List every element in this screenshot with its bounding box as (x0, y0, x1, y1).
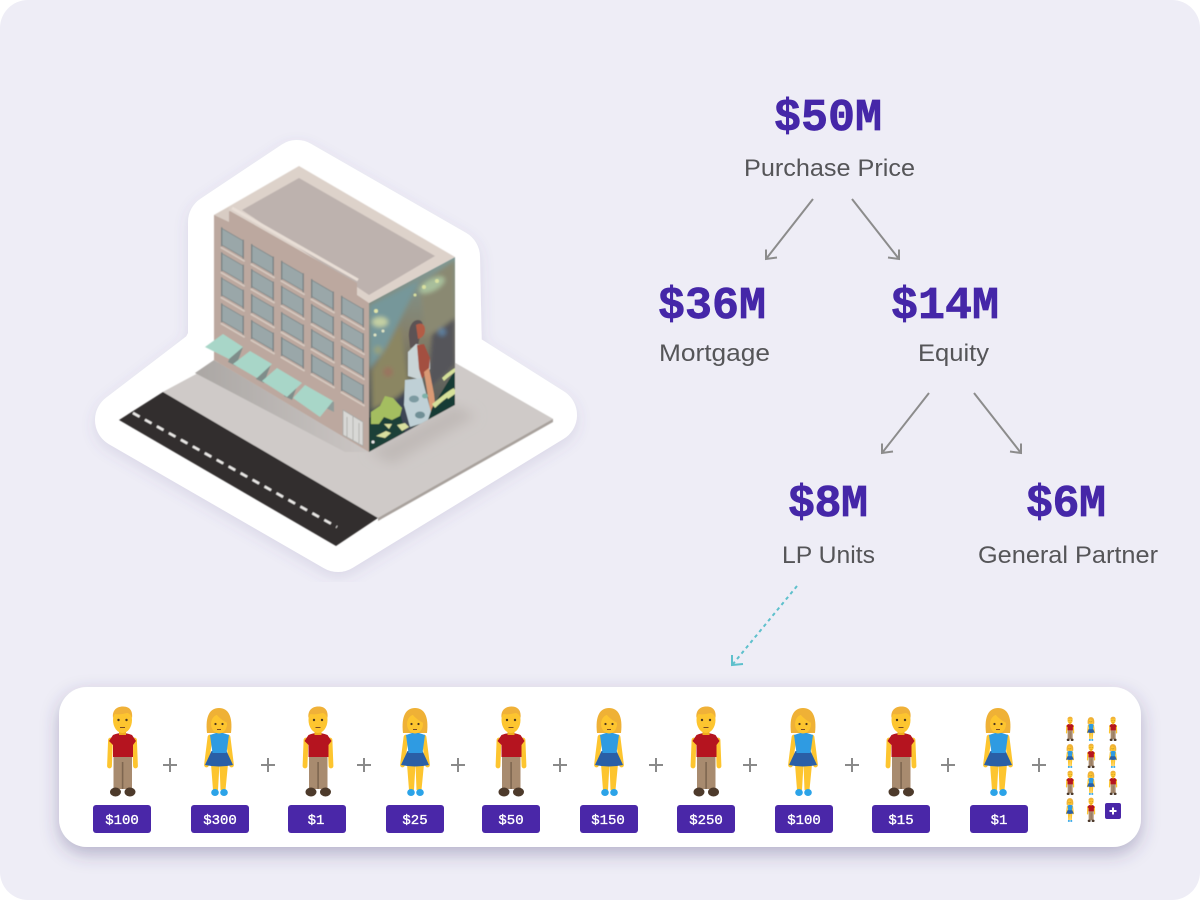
plus sign (1032, 758, 1046, 772)
road (119, 392, 378, 546)
investor 10 (970, 708, 1028, 833)
investor 9 (872, 706, 930, 833)
investor 10: $1 (991, 813, 1007, 829)
building scene (119, 166, 553, 546)
grid of more investors (1066, 717, 1121, 822)
investor 4: $25 (402, 813, 428, 829)
plus sign (553, 758, 567, 772)
sticker white outline (123, 168, 549, 544)
plus sign (941, 758, 955, 772)
node: equity: Equity (918, 340, 989, 367)
arrow: equity to LP units (882, 393, 929, 453)
node: mortgage (658, 281, 770, 367)
mural figure (404, 320, 436, 427)
investor 6: $150 (591, 813, 625, 829)
illustration: isometric building sticker (119, 166, 553, 546)
node: LP units: LP Units (782, 542, 875, 569)
investor 5 (482, 706, 540, 833)
investor 8 (775, 708, 833, 833)
roof (214, 166, 455, 303)
investor 4 (386, 708, 444, 833)
investor 7 (677, 706, 735, 833)
investor 6 (580, 708, 638, 833)
node: equity: $14M (891, 281, 999, 332)
arrow: equity to general partner (974, 393, 1021, 453)
node: LP units (782, 479, 875, 569)
investor 3 (288, 706, 346, 833)
investor 1 (93, 706, 151, 833)
investor 5: $50 (498, 813, 524, 829)
entrance door (343, 410, 363, 446)
plus sign (261, 758, 275, 772)
node: general partner: $6M (1026, 479, 1106, 530)
ground plate (163, 297, 553, 521)
investor 2 (191, 708, 249, 833)
windows (221, 227, 365, 406)
arrow: LP units to investors, dashed (732, 586, 797, 665)
node: equity (891, 281, 999, 367)
node: mortgage: $36M (658, 281, 766, 332)
plus sign (451, 758, 465, 772)
arrow: purchase price to mortgage (766, 199, 813, 259)
node: purchase price: $50M (774, 93, 882, 144)
plus sign (649, 758, 663, 772)
node: purchase price: Purchase Price (744, 155, 915, 182)
node: general partner: General Partner (978, 542, 1158, 569)
plus sign (743, 758, 757, 772)
arrow: purchase price to equity (852, 199, 899, 259)
node: general partner (978, 479, 1158, 569)
node: mortgage: Mortgage (659, 340, 770, 367)
panel: LP investors (59, 687, 1141, 847)
investor 9: $15 (888, 813, 914, 829)
investor 2: $300 (203, 813, 237, 829)
node: purchase price (744, 93, 915, 182)
awnings (205, 334, 334, 417)
building shadows (195, 360, 476, 464)
mural wall (369, 257, 455, 452)
more badge (1105, 803, 1121, 819)
plus sign (845, 758, 859, 772)
node: LP units: $8M (788, 479, 868, 530)
investor 8: $100 (787, 813, 821, 829)
mural foliage (369, 368, 455, 452)
investor 3: $1 (308, 813, 324, 829)
investor 7: $250 (689, 813, 723, 829)
investor 1: $100 (105, 813, 139, 829)
street-side wall (214, 211, 369, 452)
plus sign (163, 758, 177, 772)
plus sign (357, 758, 371, 772)
